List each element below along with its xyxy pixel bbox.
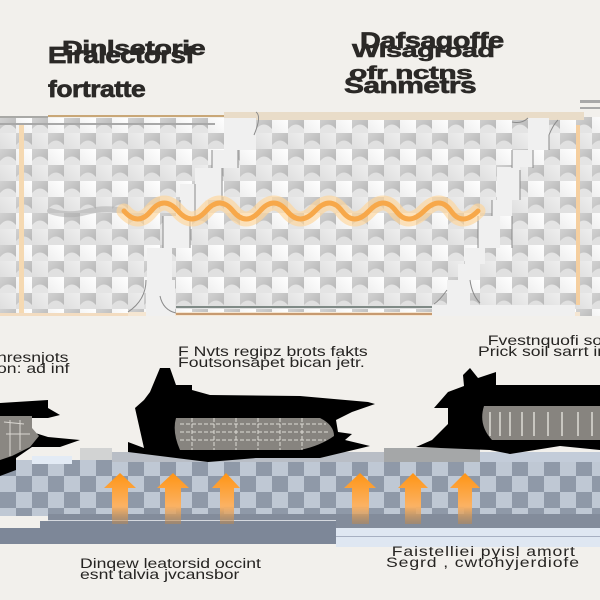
arrow: pressure 1: [104, 473, 136, 524]
caption: center insole: Foutsonsapet bican jetr.: [178, 355, 365, 370]
heading: right title: Wlsagroad: [352, 40, 494, 61]
heading: right title: ofr nctns: [349, 62, 472, 83]
panel: quilted mattress surface: [0, 100, 600, 316]
heading: left title: Eiralectorsf: [48, 42, 194, 68]
chart: heat wave line: [50, 203, 478, 219]
arrow: pressure 2: [157, 473, 189, 524]
ground: pressure layer: [0, 448, 600, 547]
caption: bottom right: Faistelliei pyisl amort: [392, 544, 576, 559]
foot silhouette: center: [128, 368, 375, 462]
heading: left title: Dinlsetorie: [62, 36, 205, 60]
arrow: pressure 5: [398, 473, 428, 524]
heading: left title: fortratte: [48, 76, 145, 102]
heading: right title: Dafsagoffe: [360, 28, 504, 53]
arrow: pressure 3: [212, 473, 240, 524]
arrow: pressure 6: [450, 473, 480, 524]
caption: bottom left: [80, 556, 261, 582]
heading: left title: [48, 36, 206, 102]
caption: bottom right: Segrd , cwtohyjerdiofe: [386, 555, 580, 570]
foot silhouette: right: [416, 368, 600, 454]
caption: right insole: [478, 333, 600, 359]
caption: bottom right: [386, 544, 580, 570]
caption: center insole: F Nvts regipz brots fakts: [178, 344, 368, 359]
foot silhouette: left: [0, 400, 80, 476]
right channel between mattress zones: [432, 118, 575, 316]
caption: left insole: [0, 350, 70, 376]
left channel between mattress zones: [128, 112, 259, 316]
caption: center insole: [178, 344, 368, 370]
caption: bottom left: esnt talvia jvcansbor: [80, 567, 239, 582]
heading: right title: Sanmetrs: [344, 73, 476, 98]
heading: right title: [344, 28, 504, 98]
caption: bottom left: Dinqew leatorsid occint: [80, 556, 261, 571]
arrow: pressure 4: [344, 473, 376, 524]
